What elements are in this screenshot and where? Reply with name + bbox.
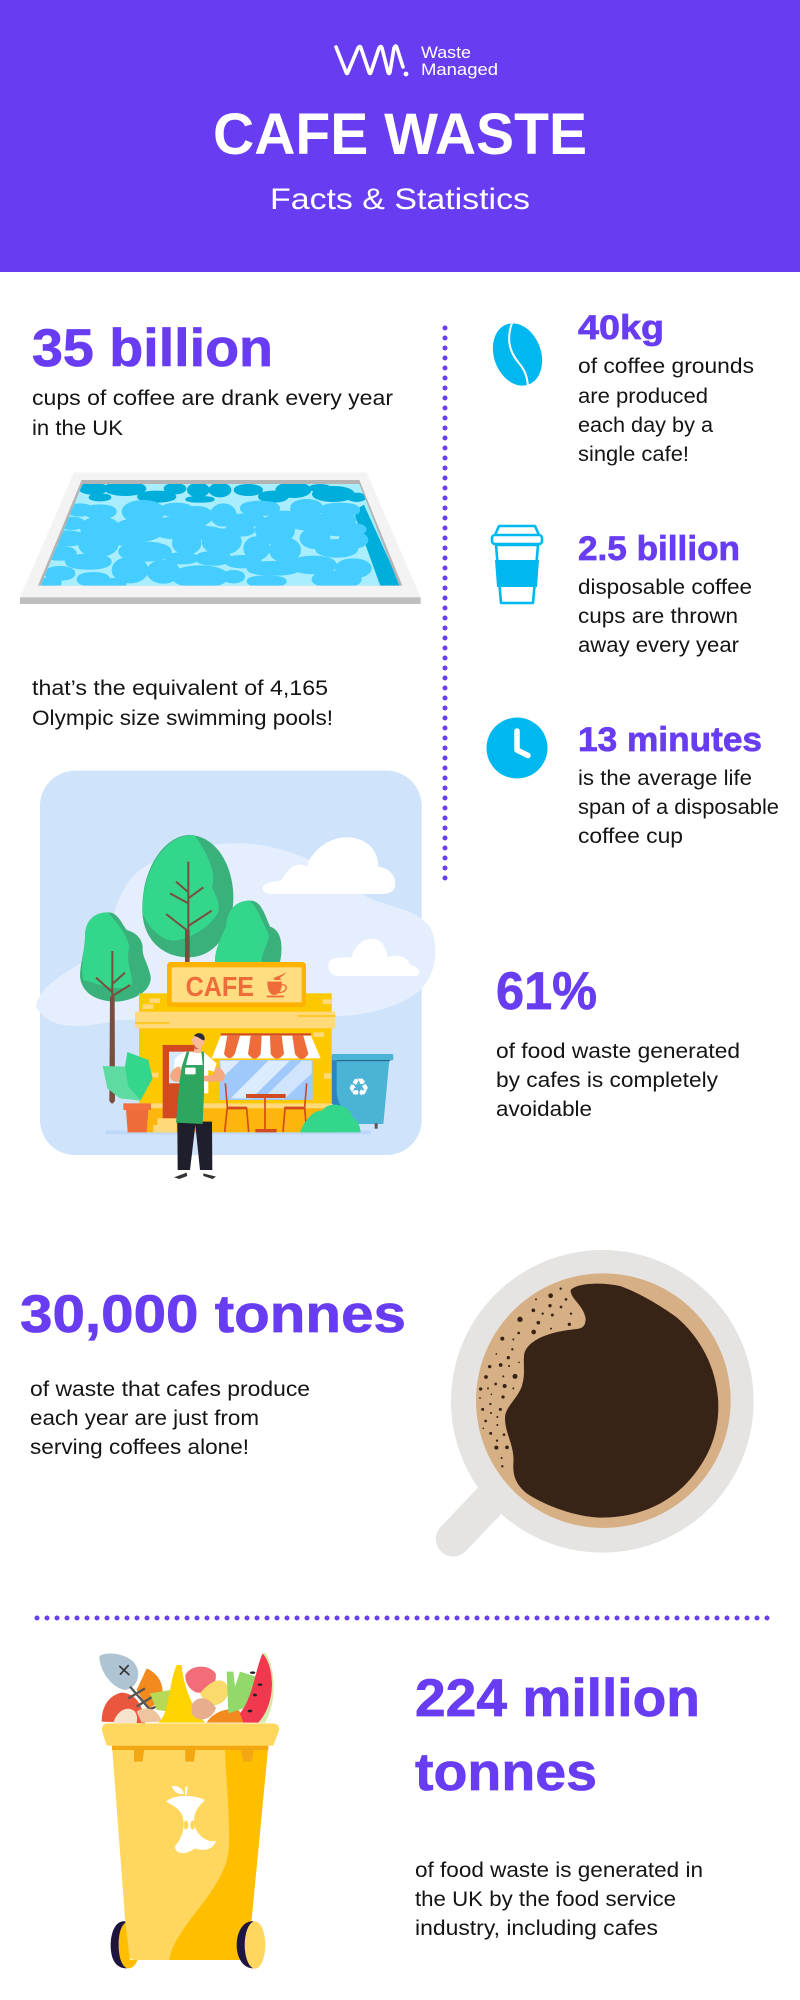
subtitle: Facts & Statistics (270, 183, 530, 216)
stat: 35 billion: in the UK (32, 416, 124, 440)
stat: 224 million tonnes: the UK by the food service (415, 1887, 676, 1911)
white clouds (263, 837, 419, 976)
stat: 13 minutes: 13 minutes (578, 721, 762, 759)
potted plant (103, 1052, 153, 1132)
icon: takeaway cup (492, 526, 542, 603)
stat: 40kg (578, 309, 754, 466)
stat: 30,000 tonnes: each year are just from (30, 1406, 259, 1430)
barista (170, 1033, 225, 1179)
stat: 35 billion: cups of coffee are drank every year (32, 386, 393, 410)
wheels (111, 1921, 265, 1969)
sky panel (40, 771, 422, 1155)
stat: 40kg: single cafe! (578, 442, 689, 466)
recycling bin: ♻ (348, 1073, 370, 1102)
stat: 2.5 billion: away every year (578, 633, 739, 657)
stat: 13 minutes: span of a disposable (578, 795, 779, 819)
stat: 224 million tonnes: of food waste is generated in (415, 1858, 703, 1882)
ground shadow (105, 1130, 371, 1134)
stat: 61%: of food waste generated (496, 1039, 740, 1063)
stat: 61%: 61% (496, 962, 597, 1021)
stat: 13 minutes: is the average life (578, 766, 752, 790)
stat: 30,000 tonnes: 30,000 tonnes (20, 1285, 406, 1344)
stat: 61%: by cafes is completely (496, 1068, 718, 1092)
cafe sign (167, 962, 306, 1007)
stat: 13 minutes: coffee cup (578, 824, 683, 848)
shop building (135, 993, 335, 1132)
bin lid (102, 1723, 279, 1746)
door (163, 1045, 197, 1118)
stat: 40kg: are produced (578, 384, 708, 408)
stat: 61%: avoidable (496, 1097, 592, 1121)
illustration: coffee cup from above (451, 1250, 754, 1553)
stat: 30,000 tonnes (20, 1285, 406, 1459)
bush (300, 1105, 361, 1132)
text: pool equivalent: that’s the equivalent of 4,165 (32, 676, 328, 700)
illustration: swimming pool (20, 472, 421, 604)
cafe sign: CAFE (186, 971, 254, 1002)
stat: 2.5 billion (578, 530, 752, 657)
stat: 40kg: 40kg (578, 309, 664, 347)
stat: 13 minutes (578, 721, 779, 848)
text: pool equivalent: Olympic size swimming pools! (32, 706, 333, 730)
recycling bin (332, 1054, 393, 1129)
stat: 224 million tonnes: industry, including cafes (415, 1916, 658, 1940)
background cloud (36, 843, 435, 1026)
stat: 30,000 tonnes: of waste that cafes produce (30, 1377, 310, 1401)
bin body (112, 1746, 268, 1960)
stat: 2.5 billion: disposable coffee (578, 575, 752, 599)
illustration: cafe storefront (36, 771, 435, 1179)
title: CAFE WASTE (213, 102, 587, 167)
food scraps (99, 1653, 274, 1723)
table and chairs (225, 1083, 307, 1132)
icon: coffee bean (484, 316, 551, 393)
stat: 2.5 billion: cups are thrown (578, 604, 738, 628)
stat: 35 billion (32, 319, 393, 440)
divider: horizontal dots (37, 1616, 770, 1620)
stat: 40kg: of coffee grounds (578, 354, 754, 378)
text: pool equivalent (32, 676, 333, 730)
logo (336, 43, 498, 79)
icon: clock (486, 718, 548, 778)
header banner (0, 0, 800, 272)
stat: 2.5 billion: 2.5 billion (578, 530, 740, 568)
stat: 61% (496, 962, 740, 1121)
icon: apple core (166, 1786, 216, 1853)
logo: Waste (421, 43, 471, 62)
stat: 224 million tonnes: tonnes (415, 1743, 597, 1802)
stat: 224 million tonnes: 224 million (415, 1669, 700, 1728)
awning (221, 1033, 311, 1036)
shop window (219, 1060, 313, 1100)
divider: vertical dots (442, 328, 448, 882)
stat: 40kg: each day by a (578, 413, 713, 437)
stat: 35 billion: 35 billion (32, 319, 273, 378)
stat: 30,000 tonnes: serving coffees alone! (30, 1435, 249, 1459)
trees (80, 835, 282, 1103)
illustration: food waste bin (99, 1653, 279, 1969)
logo: Managed (421, 60, 498, 79)
stat: 224 million tonnes (415, 1669, 703, 1940)
